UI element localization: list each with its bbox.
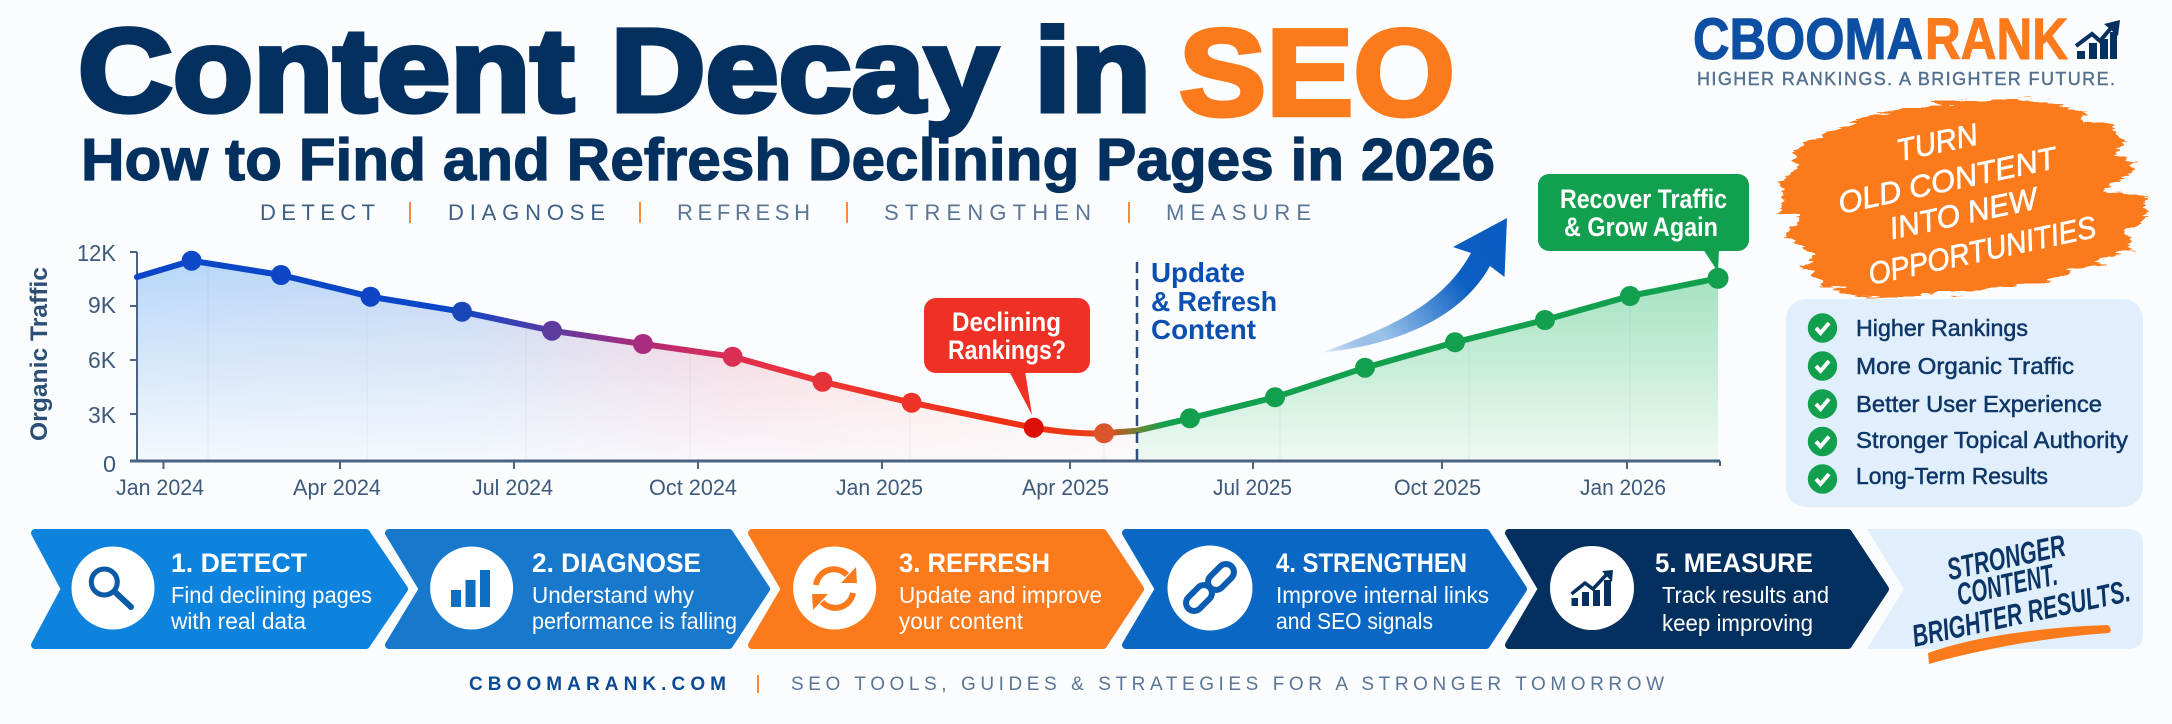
title (78, 5, 1455, 142)
footer: CBOOMARANK.COM (469, 674, 726, 695)
icon: magnifier (91, 569, 131, 607)
brush slogan: INTO NEW (1886, 180, 2043, 246)
footer: SEO TOOLS, GUIDES & STRATEGIES FOR A STRONGER TOMORROW (791, 674, 1664, 695)
x axis labels: Jan 2025 (836, 475, 923, 500)
panel: stronger content slogan (1867, 528, 2143, 664)
step 3: refresh: your content (899, 608, 1024, 634)
benefit: long-term results: Long-Term Results (1856, 463, 2048, 489)
x axis labels: Jul 2025 (1213, 475, 1292, 500)
x axis labels: Oct 2025 (1394, 475, 1481, 500)
y axis labels: 12K (77, 240, 117, 266)
logo: HIGHER RANKINGS. A BRIGHTER FUTURE. (1697, 69, 2115, 89)
chart: organic traffic line chart (26, 174, 1749, 500)
step chevrons (35, 533, 1885, 645)
x axis labels: Apr 2024 (293, 475, 381, 500)
title: SEO (1179, 5, 1455, 142)
icon: refresh arrows (812, 567, 857, 610)
decline area (138, 265, 1020, 456)
step 2: diagnose (389, 533, 766, 645)
step 3: refresh: 3. REFRESH (899, 548, 1050, 578)
x axis labels: Jan 2024 (116, 475, 204, 500)
y axis labels: 3K (88, 402, 117, 428)
step 2: diagnose: Understand why (532, 582, 694, 608)
icon: bar chart (451, 570, 490, 607)
process keyword strip: STRENGTHEN (884, 200, 1091, 225)
brush slogan: OPPORTUNITIES (1865, 209, 2099, 292)
label: update and refresh content: & Refresh (1151, 286, 1277, 317)
brush slogan: OLD CONTENT (1835, 140, 2061, 221)
x axis labels: Oct 2024 (649, 475, 737, 500)
axes (130, 252, 1720, 469)
step 4: strengthen (1126, 533, 1523, 645)
logo: CBOOMA (1693, 7, 1923, 72)
x axis labels: Jul 2024 (472, 475, 553, 500)
benefit: higher rankings: Higher Rankings (1856, 315, 2028, 341)
step 2: diagnose: performance is falling (532, 608, 737, 634)
recovery area (1137, 278, 1718, 461)
process keyword strip: MEASURE (1166, 200, 1311, 225)
y axis title: Organic Traffic (26, 267, 53, 441)
orange underline swoosh (1928, 625, 2111, 664)
logo: RANK (1925, 7, 2068, 72)
x axis labels: Jan 2026 (1580, 475, 1666, 500)
benefit: stronger topical authority: Stronger Topical Authority (1856, 427, 2129, 453)
step 4: strengthen: 4. STRENGTHEN (1276, 548, 1467, 578)
label: update and refresh content (1151, 257, 1277, 345)
label: update and refresh content: Content (1151, 314, 1256, 345)
brush slogan (1835, 117, 2099, 292)
title: Content Decay in (78, 5, 1151, 137)
process keyword strip (260, 200, 1311, 225)
step 4: strengthen: and SEO signals (1276, 608, 1433, 634)
traffic line (137, 261, 1718, 433)
callout: declining rankings: Rankings? (948, 335, 1066, 365)
icon: rising chart (1572, 570, 1613, 606)
step 5: measure (1509, 533, 1885, 645)
callout: declining rankings (924, 298, 1090, 415)
slogan text: CONTENT. (1954, 557, 2061, 612)
step 1: detect: with real data (170, 608, 306, 634)
x axis labels: Apr 2025 (1022, 475, 1109, 500)
step 1: detect (35, 533, 404, 645)
benefit: higher rankings (1808, 313, 2028, 343)
process keyword strip: REFRESH (677, 200, 810, 225)
step 2: diagnose: 2. DIAGNOSE (532, 548, 701, 578)
y axis labels: 0 (103, 451, 116, 477)
x axis labels (116, 475, 1666, 500)
step 1: detect: Find declining pages (171, 582, 372, 608)
step 3: refresh: Update and improve (899, 582, 1102, 608)
y axis labels: 6K (88, 347, 117, 373)
step 1: detect: 1. DETECT (171, 548, 307, 578)
callout: recover traffic: & Grow Again (1564, 212, 1718, 242)
step 5: measure: keep improving (1662, 610, 1813, 636)
callout: recover traffic (1538, 174, 1749, 272)
panel: benefits checklist (1786, 299, 2143, 507)
benefit: more organic traffic: More Organic Traffic (1856, 353, 2074, 379)
step 3: refresh (752, 533, 1140, 645)
step 4: strengthen: Improve internal links (1276, 582, 1489, 608)
process keyword strip: DIAGNOSE (448, 200, 605, 225)
subtitle: How to Find and Refresh Declining Pages in 2026 (81, 127, 1495, 193)
arrow: growth (1320, 218, 1507, 353)
refresh divider (1136, 262, 1138, 461)
step 5: measure: 5. MEASURE (1655, 548, 1813, 578)
data points (182, 251, 1729, 443)
step 5: measure: Track results and (1662, 582, 1829, 608)
callout: recover traffic: Recover Traffic (1560, 184, 1727, 214)
icon: chain link (1183, 561, 1237, 614)
benefit: better user experience: Better User Experience (1856, 391, 2102, 417)
slogan text: STRONGER (1944, 528, 2069, 587)
brush slogan: TURN (1893, 117, 1981, 168)
benefit: long-term results (1808, 463, 2048, 494)
icon: logo growth chart (2076, 20, 2120, 59)
y axis labels: 9K (88, 292, 117, 318)
brush banner (1778, 99, 2149, 298)
y axis labels (77, 240, 117, 477)
logo (1693, 7, 2120, 89)
benefit: more organic traffic (1808, 351, 2074, 381)
label: update and refresh content: Update (1151, 257, 1245, 288)
process keyword strip: DETECT (260, 200, 375, 225)
callout: declining rankings: Declining (952, 307, 1061, 337)
